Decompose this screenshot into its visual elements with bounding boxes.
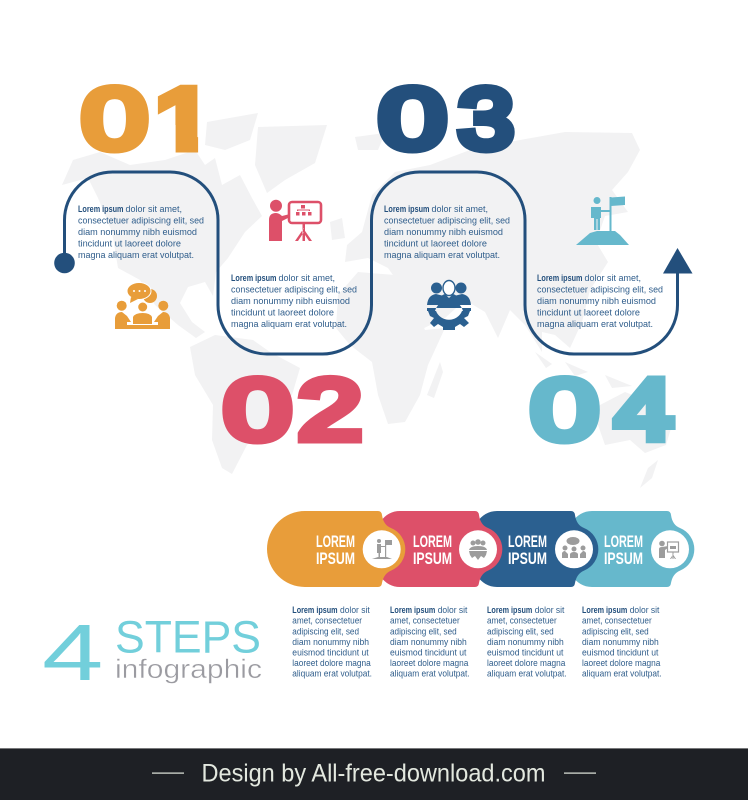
text block 2: diam nonummy nibh euismod <box>231 296 350 307</box>
arrow head <box>663 248 692 274</box>
text block 1: Lorem ipsum <box>78 204 124 215</box>
text block 2: Lorem ipsum <box>231 273 276 284</box>
column text 3: Lorem ipsum <box>487 605 532 615</box>
text block 1: magna aliquam erat volutpat. <box>78 250 194 261</box>
big number 01: 1 <box>153 72 216 167</box>
column text 2: Lorem ipsum <box>390 605 435 615</box>
column text 3: aliquam erat volutpat. <box>487 668 567 678</box>
footer bar <box>0 748 748 800</box>
big number 03 <box>377 72 515 167</box>
column text 3: diam nonummy nibh <box>487 637 564 647</box>
column text 3 <box>487 605 567 678</box>
step labels: IPSUM <box>316 549 355 568</box>
column text 1: amet, consectetuer <box>292 616 362 626</box>
text block 2 <box>231 273 357 330</box>
column text 2: laoreet dolore magna <box>390 658 468 668</box>
column text 2: dolor sit <box>438 605 468 615</box>
gray meeting icon <box>562 537 586 558</box>
title numeral 4: 4 <box>42 608 103 697</box>
icon: team and gear (blue) <box>427 280 471 330</box>
text block 3: dolor sit amet, <box>432 204 488 215</box>
text block 2: consectetuer adipiscing elit, sed <box>231 284 357 296</box>
icon: presenter at board (pink) <box>269 200 321 241</box>
text block 3 <box>384 204 510 261</box>
step 3 blue tab <box>470 511 598 587</box>
column text 1: laoreet dolore magna <box>292 658 371 668</box>
big number 04: 4 <box>615 363 673 458</box>
text block 3: Lorem ipsum <box>384 204 430 215</box>
big number 01: 0 <box>82 72 147 167</box>
text block 2: magna aliquam erat volutpat. <box>231 319 347 330</box>
big number 03: 3 <box>458 72 514 167</box>
text block 1: consectetuer adipiscing elit, sed <box>78 216 204 226</box>
column text 1 <box>292 605 372 678</box>
column text 1: diam nonummy nibh <box>292 637 369 647</box>
column text 4: dolor sit <box>630 605 660 615</box>
column text 4: laoreet dolore magna <box>582 658 660 668</box>
column text 4: Lorem ipsum <box>582 605 627 615</box>
column text 2 <box>390 605 470 678</box>
column text 4 <box>582 605 662 678</box>
step 1 orange tab <box>267 511 405 587</box>
text block 4: Lorem ipsum <box>537 273 582 284</box>
column text 3: amet, consectetuer <box>487 616 557 626</box>
text block 2: dolor sit amet, <box>278 273 335 284</box>
text block 3: diam nonummy nibh euismod <box>384 227 503 238</box>
step labels: IPSUM <box>508 549 547 568</box>
text block 4: magna aliquam erat volutpat. <box>537 319 653 330</box>
big number 04 <box>529 363 676 458</box>
big number 01 <box>80 72 198 167</box>
step labels: LOREM <box>413 532 452 551</box>
text block 4: diam nonummy nibh euismod <box>537 296 656 307</box>
step 2 pink tab <box>373 511 502 587</box>
text block 4: tincidunt ut laoreet dolore <box>537 308 640 318</box>
text block 3: magna aliquam erat volutpat. <box>384 250 500 261</box>
start dot <box>54 253 75 273</box>
text block 4: dolor sit amet, <box>584 273 641 284</box>
text block 4: consectetuer adipiscing elit, sed <box>537 284 663 296</box>
column text 3: adipiscing elit, sed <box>487 626 554 636</box>
gray presenter icon <box>659 541 678 559</box>
column text 3: dolor sit <box>535 605 565 615</box>
world map background <box>62 113 672 488</box>
column text 1: dolor sit <box>340 605 370 615</box>
column text 4: euismod tincidunt ut <box>582 648 659 658</box>
big number 02: 0 <box>224 363 291 458</box>
step labels: LOREM <box>316 532 355 551</box>
column text 2: aliquam erat volutpat. <box>390 668 470 678</box>
gray flag icon <box>372 539 392 559</box>
text block 3: tincidunt ut laoreet dolore <box>384 238 487 250</box>
column text 1: Lorem ipsum <box>292 605 338 615</box>
step labels: IPSUM <box>413 549 452 568</box>
step 4 teal tab <box>565 511 694 587</box>
step labels: LOREM <box>508 532 547 551</box>
text block 1: diam nonummy nibh euismod <box>78 227 197 238</box>
step labels: IPSUM <box>604 549 643 568</box>
step labels: LOREM <box>604 532 643 551</box>
column text 3: laoreet dolore magna <box>487 658 565 668</box>
big number 04: 0 <box>531 363 598 458</box>
title words: steps infographic: STEPS <box>115 612 261 662</box>
title words: steps infographic: infographic <box>115 654 262 684</box>
flow path with start dot and arrow <box>54 172 692 354</box>
column text 3: euismod tincidunt ut <box>487 648 564 658</box>
text block 1: dolor sit amet, <box>126 204 182 215</box>
footer bar: Design by All-free-download.com <box>202 760 546 788</box>
column text 2: adipiscing elit, sed <box>390 626 457 636</box>
big number 02: 2 <box>298 363 362 458</box>
icon: person with flag (teal) <box>576 196 629 245</box>
column text 1: adipiscing elit, sed <box>292 626 359 636</box>
text block 3: consectetuer adipiscing elit, sed <box>384 216 510 226</box>
column text 2: diam nonummy nibh <box>390 637 467 647</box>
icon: team meeting (orange) <box>115 282 170 329</box>
column text 1: euismod tincidunt ut <box>292 648 369 658</box>
column text 1: aliquam erat volutpat. <box>292 668 372 678</box>
text block 1: tincidunt ut laoreet dolore <box>78 238 181 250</box>
banner: four connected steps <box>267 511 694 587</box>
column text 2: amet, consectetuer <box>390 616 460 626</box>
big number 02 <box>222 363 362 458</box>
step labels <box>316 532 643 568</box>
gray team gear icon <box>469 539 487 560</box>
text block 4 <box>537 273 663 330</box>
column text 4: adipiscing elit, sed <box>582 626 649 636</box>
column text 2: euismod tincidunt ut <box>390 648 467 658</box>
white icon circles <box>363 530 689 568</box>
column text 4: aliquam erat volutpat. <box>582 668 662 678</box>
column text 4: diam nonummy nibh <box>582 637 659 647</box>
column text 4: amet, consectetuer <box>582 616 652 626</box>
text block 2: tincidunt ut laoreet dolore <box>231 308 334 318</box>
big number 03: 0 <box>379 72 446 167</box>
text block 1 <box>78 204 204 261</box>
